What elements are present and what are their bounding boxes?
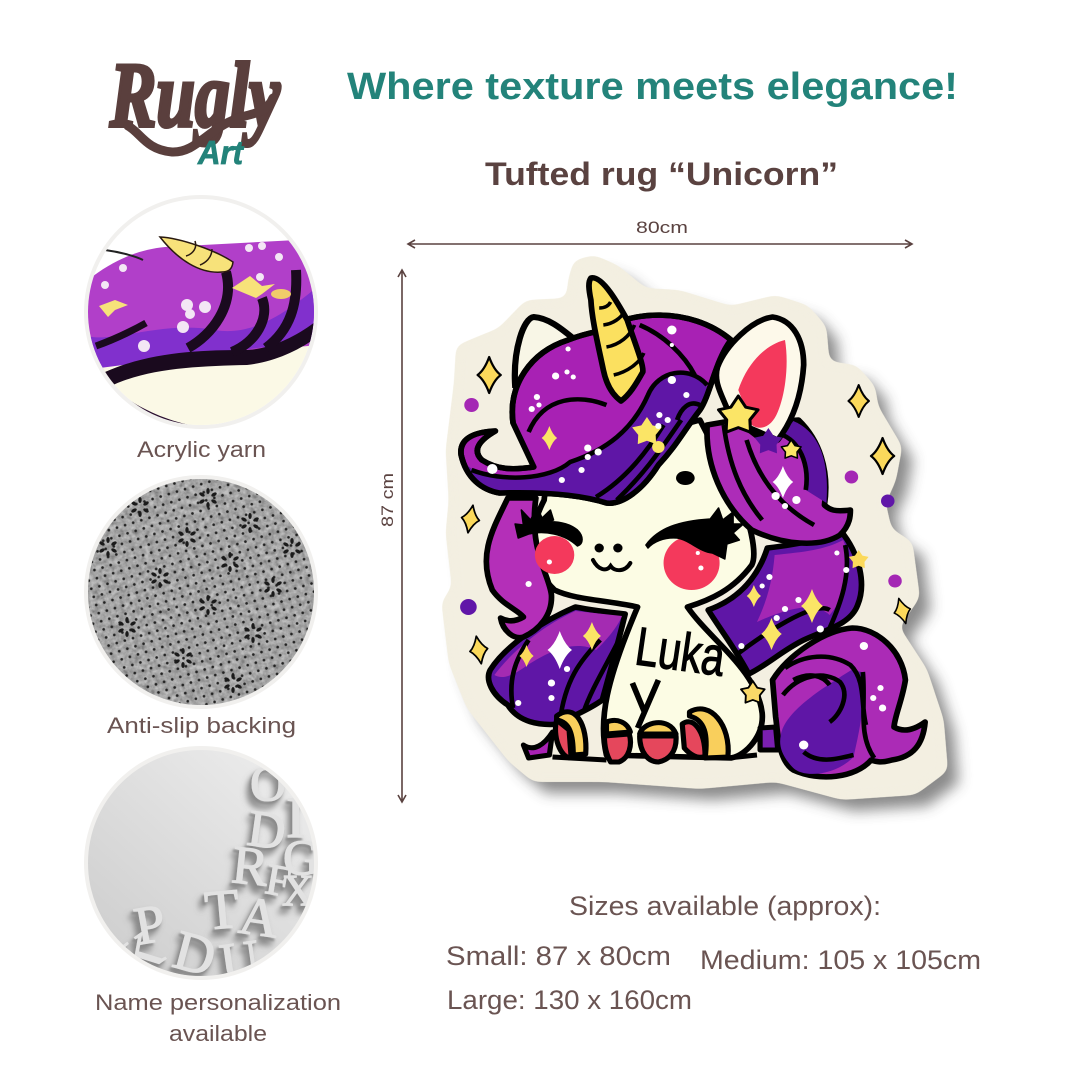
size small: Small: 87 x 80cm (446, 941, 671, 971)
embossed letters: T (202, 878, 242, 943)
product heading: Tufted rug “Unicorn” (485, 156, 838, 192)
yellow stars (232, 276, 275, 298)
width dimension (408, 218, 912, 248)
circle: name personalization embossed letters (84, 746, 319, 993)
left ear (515, 317, 575, 385)
rug cream border (443, 257, 946, 798)
logo: Rugly Art (109, 44, 281, 171)
logo wordmark: Rugly (109, 44, 281, 146)
height label: 87 cm (378, 473, 397, 527)
embossed letters: X (282, 866, 314, 915)
hooves (523, 680, 778, 762)
height dimension (378, 270, 406, 802)
tail (773, 628, 925, 777)
embossed letters: F (262, 854, 294, 907)
embossed letters: P (130, 892, 170, 957)
left upper hair lock (486, 498, 552, 638)
embossed letters: R (229, 834, 271, 898)
embossed letters: G (283, 829, 319, 885)
size medium: Medium: 105 x 105cm (700, 945, 981, 975)
left lower hair (489, 607, 625, 724)
white yarn dots (101, 242, 283, 352)
cream rug area (103, 346, 308, 425)
right ear (716, 317, 804, 440)
caption: anti-slip backing: Anti-slip backing (107, 713, 296, 738)
right lower hair (708, 530, 861, 674)
circle: acrylic yarn close-up (84, 195, 320, 440)
body star (741, 681, 765, 703)
size large: Large: 130 x 160cm (447, 985, 692, 1015)
face details (515, 471, 743, 590)
embossed letters: A (236, 885, 283, 950)
logo sub-word Art: Art (197, 134, 245, 171)
caption: acrylic yarn: Acrylic yarn (137, 437, 266, 462)
right eye lashes (646, 508, 743, 559)
logo swash (128, 98, 273, 152)
width label: 80cm (636, 218, 688, 237)
top hair (461, 315, 731, 503)
black outline band (102, 323, 314, 384)
horn close-up (160, 237, 233, 272)
left cheek (535, 536, 574, 574)
unicorn face and body (533, 420, 762, 758)
embossed letters: U (216, 928, 263, 993)
border sparkles and dots (459, 357, 914, 665)
hair stars and sparkles (487, 326, 886, 750)
name on rug: Luka (632, 615, 729, 688)
width arrow (408, 240, 912, 248)
title: Where texture meets elegance! (347, 66, 958, 108)
dot flowers (99, 488, 301, 693)
caption: name personalization: Name personalization (95, 990, 341, 1015)
photo: unicorn rug (443, 257, 958, 811)
sizes block (446, 891, 981, 1015)
rug shadow (456, 272, 958, 811)
purple hair band (84, 240, 320, 365)
height arrow (398, 270, 406, 802)
sizes heading: Sizes available (approx): (569, 891, 881, 921)
mouth (593, 560, 630, 570)
nose dots (595, 544, 623, 552)
caption: name personalization: available (169, 1021, 267, 1046)
horn (589, 278, 644, 401)
embossed letters: K (107, 919, 173, 990)
black lower outline (132, 401, 188, 424)
caption: name personalization (95, 990, 341, 1046)
embossed letters (123, 768, 314, 976)
embossed letters: I (286, 785, 305, 850)
embossed letters: O (250, 755, 286, 811)
right hair lock (707, 420, 850, 543)
embossed letters: D (244, 800, 289, 862)
circle: anti-slip backing (84, 475, 318, 709)
embossed letters: D (167, 919, 222, 989)
forehead dot (676, 471, 695, 485)
left eye lashes (515, 507, 582, 546)
right cheek (664, 536, 720, 590)
